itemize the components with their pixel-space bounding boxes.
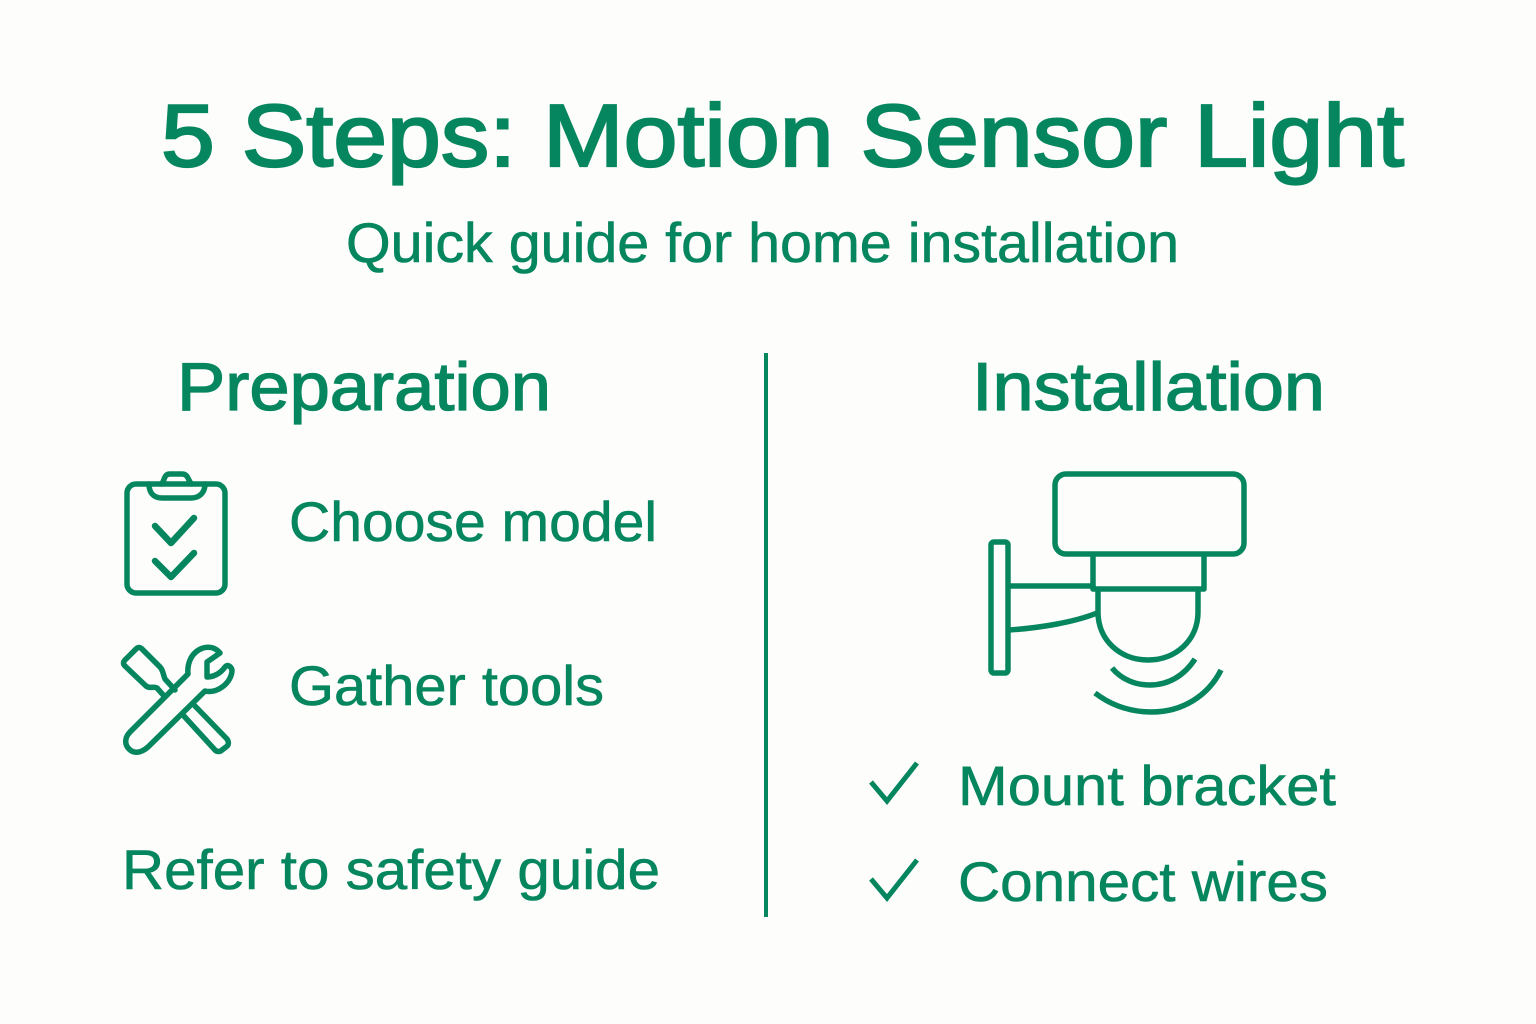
text: choose model: Choose model xyxy=(289,490,657,553)
text: mount bracket: Mount bracket xyxy=(958,754,1336,817)
heading: preparation: Preparation xyxy=(177,349,551,425)
icon: check xyxy=(871,763,917,801)
list item: mount bracket xyxy=(871,754,1336,817)
icon: crossed wrench and screwdriver xyxy=(124,647,232,752)
icon: motion sensor light xyxy=(991,474,1244,712)
panel: installation xyxy=(871,349,1336,913)
title: 5 Steps: Motion Sensor Light xyxy=(161,86,1404,185)
heading: installation: Installation xyxy=(972,349,1325,425)
icon: check xyxy=(871,860,917,898)
text: gather tools: Gather tools xyxy=(289,654,604,717)
text: connect wires: Connect wires xyxy=(958,850,1328,913)
text: refer to safety guide: Refer to safety guide xyxy=(122,838,660,901)
panel: preparation xyxy=(122,349,660,901)
icon: clipboard checklist xyxy=(127,474,225,593)
list item: connect wires xyxy=(871,850,1328,913)
subtitle: Quick guide for home installation xyxy=(346,211,1179,274)
divider xyxy=(764,353,768,917)
